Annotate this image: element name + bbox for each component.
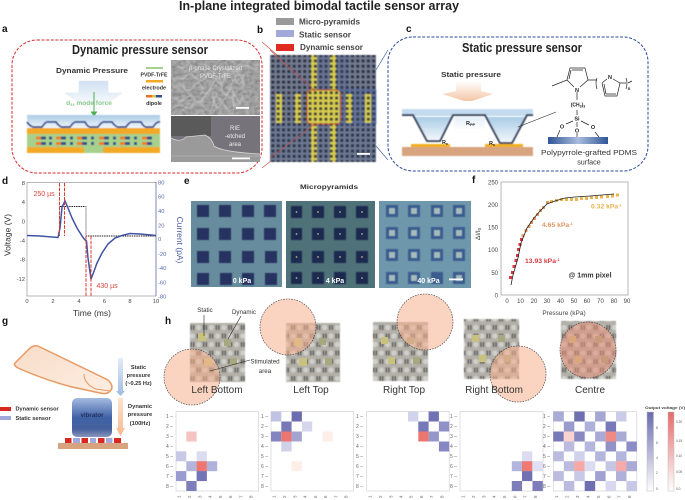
micrograph 40 kPa [379, 201, 471, 288]
y ticks f [488, 180, 499, 300]
panel d: voltage and current chart: Current (pA) [175, 217, 185, 264]
PDMS bar [548, 137, 608, 144]
photo: right top: Right Top [383, 385, 425, 396]
x ticks f: 10 [517, 299, 524, 305]
heatmap 1: left bottom: 7 – [166, 474, 173, 480]
heatmap 2: left top: 6 – [261, 464, 268, 470]
SEM image: etched area: RIE [230, 126, 240, 132]
molecule [552, 68, 632, 138]
panel label h: h [165, 316, 171, 327]
connector lines: panel b to a and c [262, 42, 388, 168]
panel c: static pressure sensor [388, 24, 648, 171]
heatmap 1: left bottom: 2 [187, 495, 192, 498]
panel label c: c [406, 24, 412, 35]
callouts static and dynamic: Stimulated [250, 358, 280, 366]
static pressure note: Static [131, 365, 146, 371]
vibrator: vibrator [80, 412, 104, 419]
static pressure note: pressure [127, 373, 150, 379]
x axis ticks d: 4 [77, 299, 81, 305]
panel f: sensitivity chart: Pressure (kPa) [542, 310, 586, 317]
SEM image: etched area: -etched [225, 134, 245, 140]
legend g [0, 406, 60, 422]
right axis ticks d [158, 180, 166, 300]
photo: left bottom [164, 323, 245, 405]
heatmap 1: left bottom: 3 [198, 495, 203, 498]
heatmap 4: right bottom: 7 – [450, 474, 457, 480]
y ticks f: 200 [488, 203, 499, 209]
panel label a: a [2, 24, 8, 35]
heatmap 1: left bottom: 4 [208, 495, 213, 498]
x ticks f: 70 [597, 299, 604, 305]
heatmap 5: centre: 5 – [543, 454, 550, 460]
x ticks f: 40 [557, 299, 564, 305]
heatmap 2: left top [261, 412, 354, 498]
x axis ticks d: 2 [51, 299, 55, 305]
molecule atoms: O [560, 124, 565, 130]
current trace [27, 201, 156, 279]
heatmap 3: right top: 2 – [356, 424, 363, 430]
right axis ticks d: -20 [158, 252, 166, 258]
legend b: Dynamic sensor [300, 43, 363, 52]
heatmap 4: right bottom: 8 [533, 495, 538, 498]
heatmap 4: right bottom [450, 412, 543, 498]
panel label b: b [257, 25, 263, 36]
static bar ticks: 0 [656, 487, 658, 491]
callouts static and dynamic [197, 307, 280, 375]
left axis ticks d: -8 [20, 258, 25, 264]
right axis ticks d: -60 [158, 280, 166, 286]
data points yellow [550, 194, 619, 203]
heatmap 1: left bottom: 7 [239, 495, 244, 498]
photo: centre: Centre [575, 385, 605, 396]
force label: 33 [70, 102, 75, 107]
zoom line to molecule [518, 112, 556, 127]
dynamic bar ticks [676, 420, 682, 491]
static pressure label: Static pressure [441, 70, 501, 79]
left axis ticks d: 0 [22, 220, 25, 226]
resistance labels [442, 121, 495, 147]
heatmap 3: right top: 1 – [356, 414, 363, 420]
heatmap 3: right top: 3 – [356, 434, 363, 440]
heatmap 2: left top: 1 [272, 495, 277, 498]
callouts static and dynamic: Dynamic [232, 309, 256, 316]
icon: finger [14, 346, 112, 394]
red lines over micrograph [270, 50, 315, 158]
static pressure arrows [442, 81, 493, 101]
heatmap 4: right bottom: 4 – [450, 444, 457, 450]
heatmap 3: right top: 7 – [356, 474, 363, 480]
heatmap 3: right top: 7 [429, 495, 434, 498]
resistance labels: R [442, 140, 446, 146]
heatmap 1: left bottom [166, 412, 258, 498]
x ticks f: 90 [624, 299, 631, 305]
heatmap 5: centre: 7 – [543, 474, 550, 480]
heatmap 4: right bottom: 2 [471, 495, 476, 498]
legend b: Micro-pyramids [299, 18, 361, 26]
molecule atoms: n [628, 86, 631, 91]
dynamic bar ticks: 0.20 [676, 420, 682, 424]
photo: centre [560, 321, 616, 396]
callouts static and dynamic: area [259, 368, 272, 375]
heatmap 2: left top: 7 [334, 495, 339, 498]
heatmap 1: left bottom: 1 – [166, 414, 173, 420]
molecule atoms: O [575, 128, 580, 134]
panel a: dynamic pressure sensor [2, 24, 262, 173]
static pressure note: (~0.25 Hz) [125, 381, 152, 387]
x axis ticks d: 8 [128, 299, 132, 305]
dashed frame a [12, 40, 262, 173]
heatmap 2: left top: 3 – [261, 434, 268, 440]
molecule atoms: 3 [580, 104, 582, 108]
axis titles d: Voltage (V) [2, 214, 12, 256]
molecule atoms: O [591, 125, 596, 131]
heatmap 3: right top: 5 – [356, 454, 363, 460]
PDMS caption: Polypyrrole-grafted PDMS [541, 148, 637, 157]
heatmap 1: left bottom: 6 [228, 495, 233, 498]
micrograph 0 kPa: 0 kPa [233, 278, 251, 285]
dynamic arrow [116, 398, 125, 436]
left axis ticks d: 8 [22, 181, 25, 187]
x ticks f: 30 [544, 299, 551, 305]
legend b: Static sensor [299, 30, 351, 40]
heatmap 5: centre: 5 [596, 495, 601, 498]
heatmap 2: left top: 1 – [261, 414, 268, 420]
photo: right bottom: Right Bottom [465, 385, 523, 396]
heatmap 4: right bottom: 3 [482, 495, 487, 498]
slope label high: 13.93 kPa [525, 258, 556, 265]
plot frame d [27, 182, 156, 296]
x axis ticks d [25, 299, 159, 305]
panel b: sensor layout [257, 18, 376, 162]
molecule atoms: N [608, 75, 612, 81]
dynamic bar ticks: 0.10 [676, 454, 682, 458]
heatmap 2: left top: 5 [313, 495, 318, 498]
left axis ticks d: -4 [20, 238, 26, 244]
dynamic bar ticks: 0.15 [676, 439, 682, 443]
heatmap 3: right top: 8 [440, 495, 445, 498]
legend g: Dynamic sensor [16, 406, 60, 412]
y ticks f: 50 [491, 271, 499, 277]
resistance labels: R [489, 141, 493, 147]
dynamic pressure note: pressure [128, 412, 153, 418]
static colour bar [647, 412, 654, 491]
x axis ticks d: 6 [103, 299, 106, 305]
dynamic pressure note: (100Hz) [130, 421, 150, 427]
left axis ticks d [17, 181, 26, 283]
timing label 430: 430 µs [96, 283, 118, 290]
heading e: Micropyramids [300, 184, 358, 191]
dynamic colour bar [668, 412, 674, 491]
SEM image: crystallized film [171, 60, 260, 115]
heatmap 2: left top: 6 [323, 495, 328, 498]
static pressure note [125, 365, 152, 387]
heatmap 1: left bottom: 2 – [166, 424, 173, 430]
micrograph 4 kPa [286, 201, 375, 288]
photo: left bottom: Left Bottom [191, 385, 243, 396]
panel label d: d [2, 176, 8, 187]
static bar ticks: 2 [656, 471, 658, 475]
heatmap 1: left bottom: 8 [249, 495, 254, 498]
heatmap 1: left bottom: 3 – [166, 434, 173, 440]
x ticks f: 60 [584, 299, 591, 305]
heatmap 4: right bottom: 7 [523, 495, 528, 498]
slope label low: -1 [618, 202, 623, 208]
y ticks f: 100 [488, 248, 499, 254]
resistance labels: c [446, 142, 448, 146]
right axis ticks d: 80 [158, 180, 164, 186]
static bar ticks: 8 [656, 426, 658, 430]
SEM image: etched area [171, 116, 260, 162]
molecule atoms: ) [582, 102, 584, 108]
colour scale legend [645, 405, 685, 491]
timing markers [60, 183, 91, 296]
heatmap 5: centre: 2 – [543, 424, 550, 430]
heatmap 2: left top: 2 [282, 495, 287, 498]
resistance labels: c [493, 143, 495, 147]
photo: left top [260, 299, 340, 396]
resistance labels: PP [470, 123, 476, 127]
heatmap 5: centre: 7 [617, 495, 622, 498]
heatmap 4: right bottom: 3 – [450, 434, 457, 440]
right axis ticks d: 20 [158, 224, 164, 230]
pyramid structure [402, 109, 533, 156]
panel f: sensitivity chart [472, 175, 631, 317]
panel label g: g [2, 316, 8, 327]
static arrow [116, 358, 125, 396]
dynamic pressure note [128, 404, 153, 427]
heading c: Static pressure sensor [462, 41, 582, 55]
force label: mode force [75, 100, 112, 107]
panel label e: e [184, 176, 190, 187]
slope label mid: 4.65 kPa [542, 222, 569, 229]
heatmap 3: right top: 8 – [356, 484, 363, 490]
x axis ticks d: 10 [153, 299, 159, 305]
micrograph 40 kPa: 40 kPa [417, 278, 440, 285]
right axis ticks d: -40 [158, 266, 166, 272]
heatmap 3: right top: 6 [419, 495, 424, 498]
callouts static and dynamic: Static [197, 307, 213, 314]
heatmap 1: left bottom: 4 – [166, 444, 173, 450]
heatmap 4: right bottom: 4 [492, 495, 497, 498]
right axis ticks d: 0 [158, 237, 161, 243]
layer stack [27, 115, 160, 153]
legend title: Output voltage (V) [645, 405, 685, 410]
heatmap 1: left bottom: 8 – [166, 484, 173, 490]
heatmap 2: left top: 8 – [261, 484, 268, 490]
heatmap 1: left bottom: 6 – [166, 464, 173, 470]
heatmap 4: right bottom: 5 [502, 495, 507, 498]
molecule atoms: N [575, 88, 579, 94]
molecule atoms: (CH [571, 102, 580, 108]
y ticks f: 250 [488, 180, 499, 186]
molecule atoms: 3 [583, 104, 585, 108]
fit curve [511, 194, 614, 285]
heatmap 5: centre: 3 – [543, 434, 550, 440]
photo: right bottom [464, 319, 546, 402]
heatmap 3: right top: 3 [389, 495, 394, 498]
panel d: voltage and current chart: Time (ms) [73, 308, 111, 318]
panel h: stimulated area photos [164, 294, 616, 405]
x ticks f [505, 299, 631, 305]
SEM image: etched area: area [229, 142, 242, 148]
heatmap 4: right bottom: 5 – [450, 454, 457, 460]
heatmap 1: left bottom: 1 [177, 495, 182, 498]
panel d: voltage and current chart [2, 176, 185, 318]
heatmap 2: left top: 8 [344, 495, 349, 498]
SEM image: crystallized film: β-phase Crystalized [189, 66, 242, 72]
panel e: micropyramid micrographs [184, 176, 471, 288]
y ticks f: 0 [495, 294, 499, 300]
heatmap 5: centre [543, 412, 637, 498]
heatmap 5: centre: 6 [607, 495, 612, 498]
right axis ticks d: 40 [158, 209, 164, 215]
micrograph 4 kPa: 4 kPa [326, 278, 344, 285]
heatmap 3: right top [356, 412, 449, 498]
heatmap 4: right bottom: 2 – [450, 424, 457, 430]
axis titles f: ΔI/I [475, 230, 482, 240]
data points orange [522, 201, 549, 237]
static bar ticks: 4 [656, 456, 658, 460]
vibrator [72, 398, 112, 437]
heatmap 1: left bottom: 5 [218, 495, 223, 498]
left axis ticks d: 4 [22, 200, 26, 206]
dashed frame c [388, 37, 648, 171]
dynamic pressure note: Dynamic [128, 404, 153, 410]
heatmap 3: right top: 6 – [356, 464, 363, 470]
heatmap 5: centre: 8 – [543, 484, 550, 490]
pressure arrows [65, 81, 122, 108]
materials legend: PVDF-TrFE [140, 72, 168, 78]
dynamic bar ticks: 0.0 [676, 487, 681, 491]
scale bar b [357, 153, 370, 155]
resistance labels: R [466, 121, 470, 127]
heatmap 3: right top: 1 [368, 495, 373, 498]
x ticks f: 80 [611, 299, 618, 305]
static bar ticks [656, 426, 658, 491]
static bar ticks: 6 [656, 441, 658, 445]
molecule atoms: Si [574, 116, 580, 122]
heading a: Dynamic pressure sensor [72, 43, 208, 57]
legend b [276, 18, 363, 52]
plot frame f [501, 182, 628, 295]
x ticks f: 50 [571, 299, 578, 305]
heatmap 2: left top: 2 – [261, 424, 268, 430]
heatmap 4: right bottom: 1 – [450, 414, 457, 420]
voltage trace [60, 206, 156, 236]
micrograph 0 kPa [191, 201, 282, 287]
green arrow [92, 92, 96, 116]
legend g: Static sensor [16, 416, 51, 422]
heatmap 3: right top: 4 – [356, 444, 363, 450]
photo: left top: Left Top [293, 385, 329, 396]
heatmap 4: right bottom: 6 – [450, 464, 457, 470]
right axis ticks d: 60 [158, 194, 164, 200]
y ticks f: 150 [488, 226, 499, 232]
heatmap 5: centre: 4 – [543, 444, 550, 450]
heatmap 5: centre: 8 [627, 495, 632, 498]
heatmap 2: left top: 7 – [261, 474, 268, 480]
micrograph b [270, 55, 376, 162]
dynamic pressure label: Dynamic Pressure [56, 66, 128, 75]
heatmap 2: left top: 4 – [261, 444, 268, 450]
heatmap 5: centre: 1 [554, 495, 559, 498]
materials legend: dipole [146, 101, 162, 107]
heatmap 4: right bottom: 1 [461, 495, 466, 498]
force label: d [66, 100, 70, 107]
heatmap 4: right bottom: 6 [513, 495, 518, 498]
heatmap 1: left bottom: 5 – [166, 454, 173, 460]
heatmap 3: right top: 2 [378, 495, 383, 498]
slope label mid: -1 [569, 221, 574, 226]
x ticks f: 20 [531, 299, 538, 305]
timing label 250: 250 µs [34, 191, 55, 198]
x ticks f: 0 [505, 299, 509, 305]
heatmap 2: left top: 3 [293, 495, 298, 498]
photo: right top [373, 294, 453, 396]
heatmap 5: centre: 1 – [543, 414, 550, 420]
PDMS caption [541, 148, 637, 166]
SEM image: crystallized film: PVDF-TrFE [200, 74, 231, 80]
axis titles f: 0 [477, 227, 482, 230]
panel label f: f [472, 175, 476, 186]
pixel note: @ 1mm pixel [568, 272, 612, 280]
panel g: finger and vibrator setup [0, 316, 153, 449]
slope label high: -1 [556, 257, 560, 262]
dynamic bar ticks: 0.05 [676, 470, 682, 474]
heatmap 3: right top: 4 [399, 495, 404, 498]
heatmap 4: right bottom: 8 – [450, 484, 457, 490]
heatmap 5: centre: 6 – [543, 464, 550, 470]
data points red [509, 238, 523, 279]
materials legend [140, 67, 168, 107]
left axis ticks d: -12 [17, 277, 25, 283]
right axis ticks d: -80 [158, 294, 166, 300]
heatmap 2: left top: 4 [303, 495, 308, 498]
PDMS caption: surface [577, 158, 601, 166]
heatmap 5: centre: 2 [565, 495, 570, 498]
materials legend: electrode [142, 86, 166, 92]
heatmap 5: centre: 3 [575, 495, 580, 498]
heatmap 5: centre: 4 [586, 495, 591, 498]
heatmap 2: left top: 5 – [261, 454, 268, 460]
sensor row [58, 438, 128, 449]
slope label low: 0.32 kPa [591, 204, 618, 210]
molecule atoms [560, 75, 631, 134]
x axis ticks d: 0 [25, 299, 29, 305]
heatmap 3: right top: 5 [409, 495, 414, 498]
